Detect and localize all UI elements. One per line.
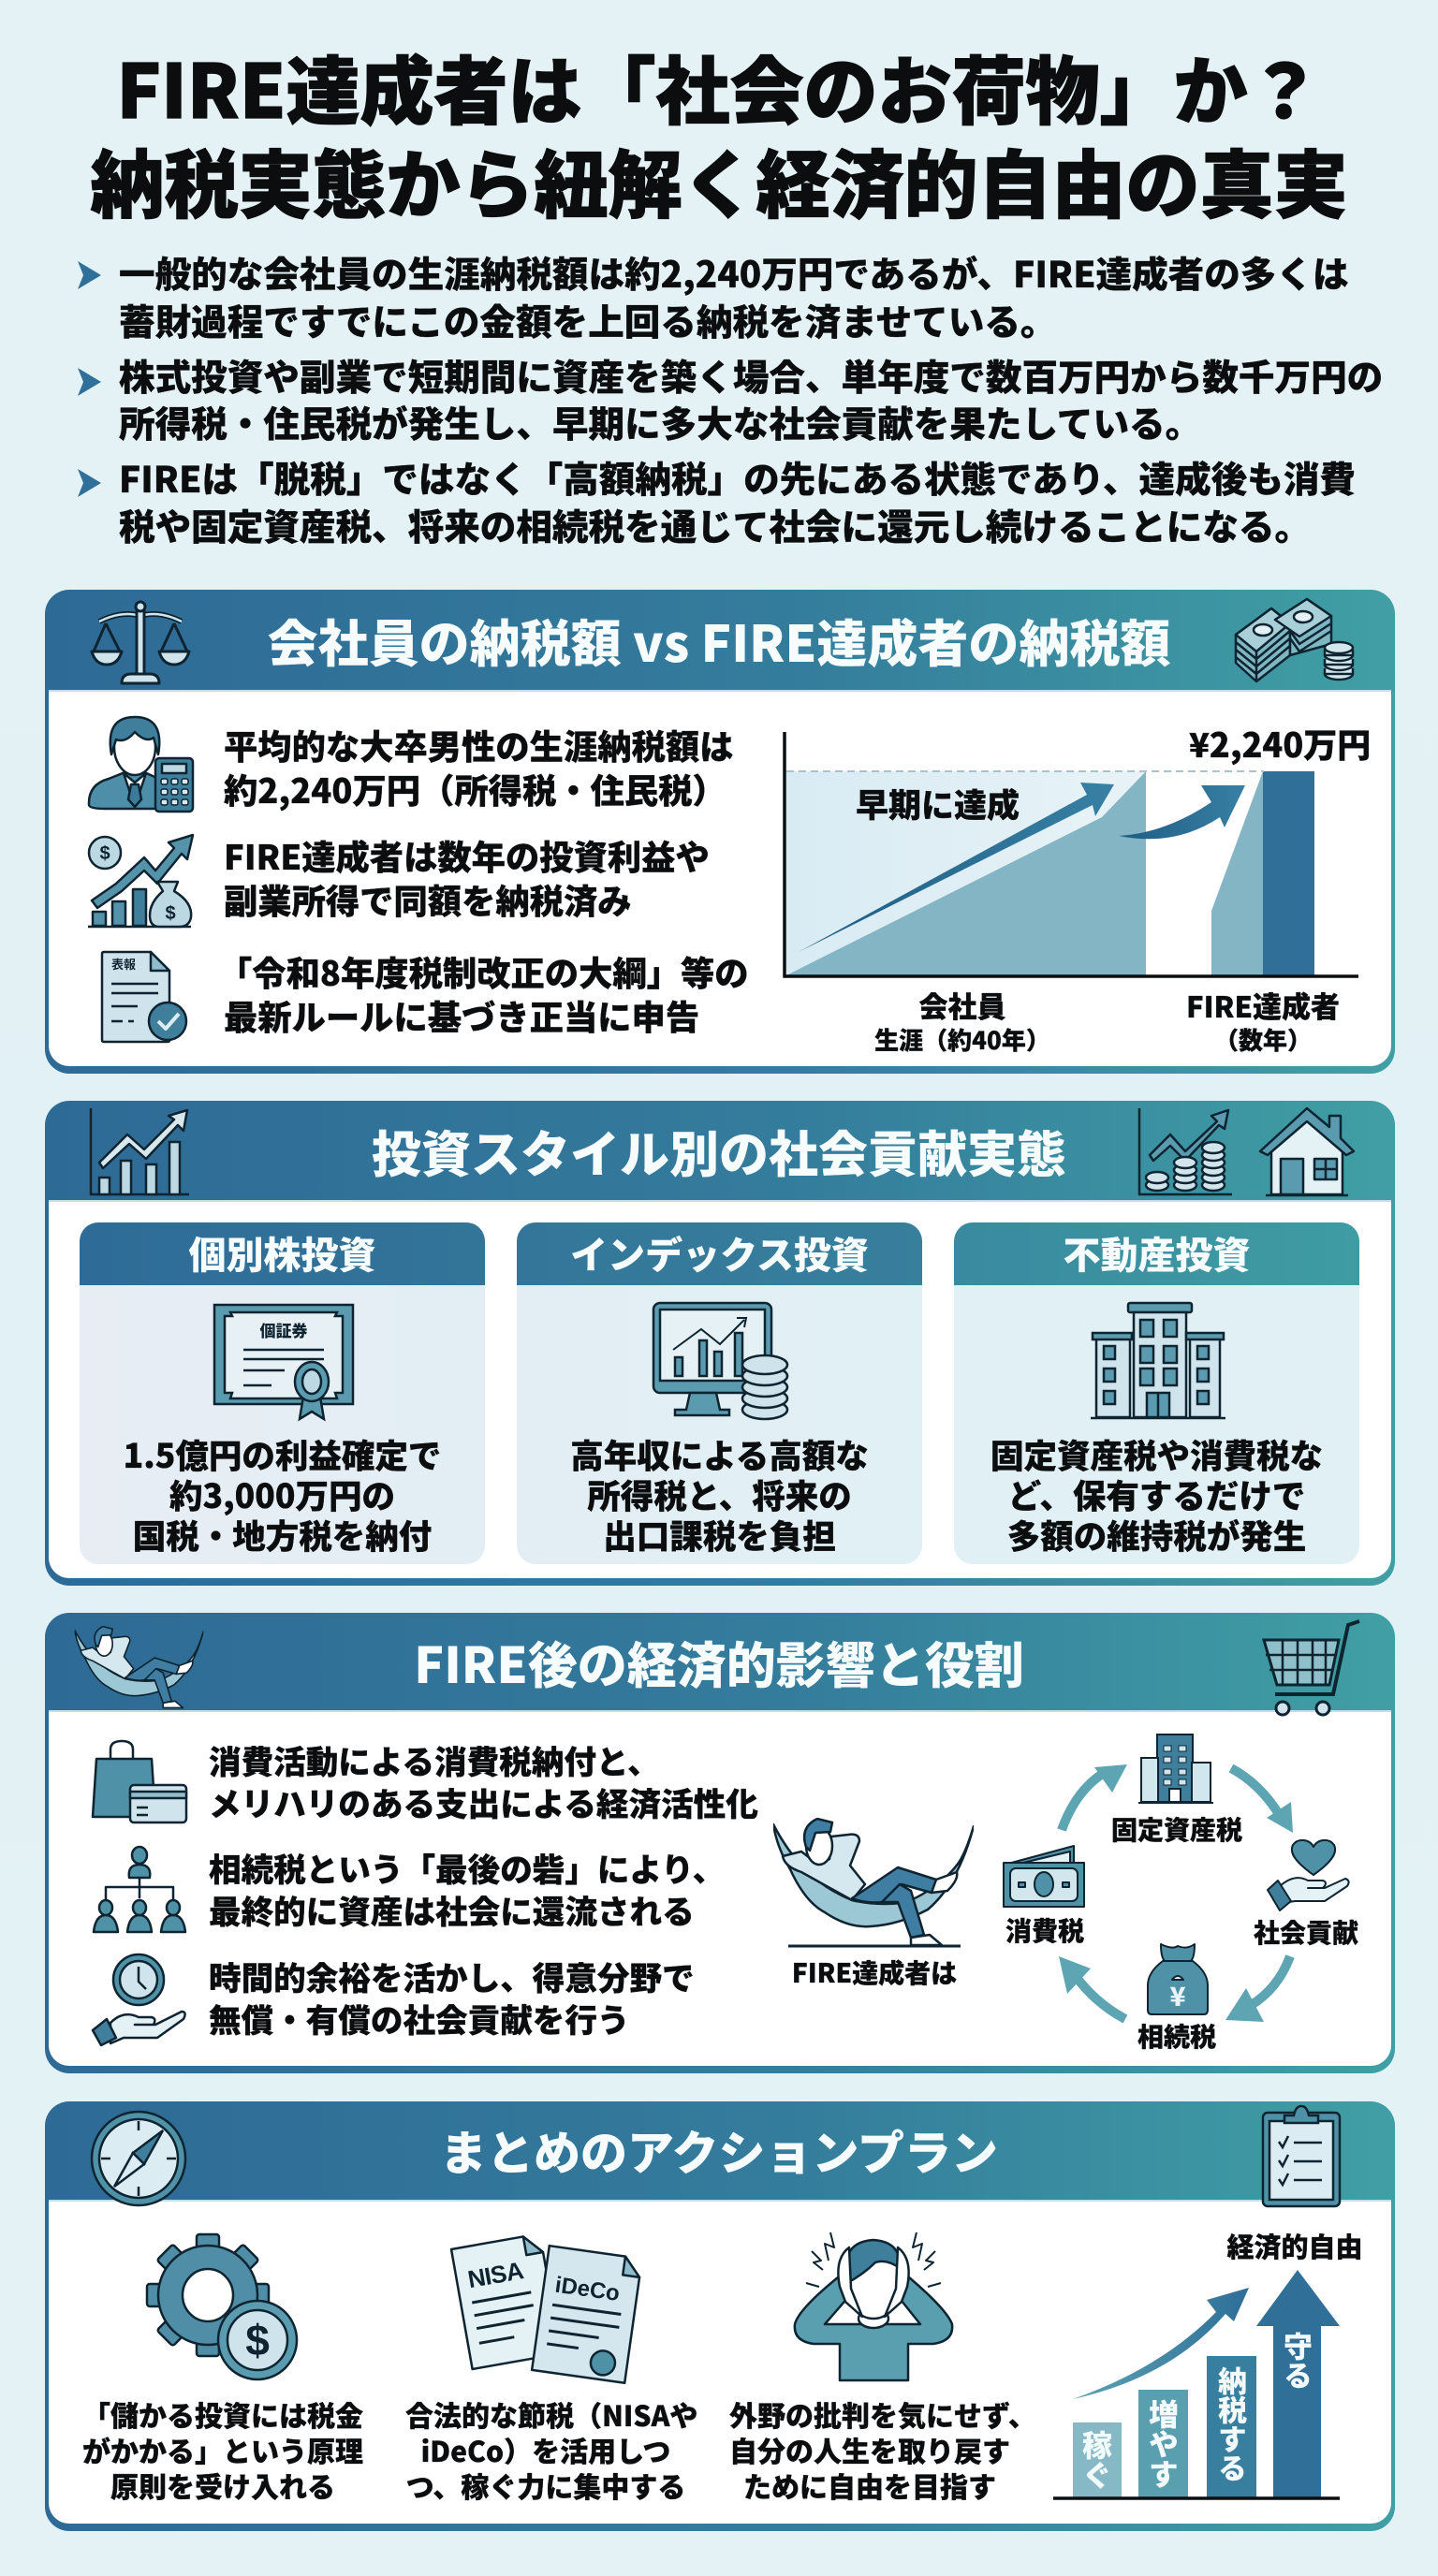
card text: 1.5億円の利益確定で	[124, 1430, 441, 1478]
chart: steps to freedom	[1053, 2270, 1343, 2504]
text: consumption: メリハリのある支出による経済活性化	[209, 1778, 758, 1825]
icon: person covering ears	[793, 2231, 954, 2380]
icon: yen money bag: ¥	[1169, 1977, 1186, 2014]
heading: まとめのアクションプラン	[440, 2116, 998, 2184]
text: legal saving: つ、稼ぐ力に集中する	[406, 2465, 685, 2506]
text: tax reform: 最新ルールに基づき正当に申告	[224, 991, 699, 1040]
icon: office building	[1138, 1734, 1213, 1803]
card text	[570, 1430, 869, 1559]
label: freedom: 経済的自由	[1226, 2226, 1363, 2265]
text: accept tax: 原則を受け入れる	[110, 2465, 335, 2506]
title	[90, 32, 1348, 233]
label: FIRE person: FIRE達成者は	[792, 1954, 957, 1991]
text: accept tax: 「儲かる投資には税金	[82, 2393, 363, 2435]
card text: 高年収による高額な	[570, 1430, 869, 1478]
icon: money stack	[1234, 597, 1354, 683]
card text: 約3,000万円の	[169, 1471, 395, 1518]
text: FIRE tax paid: FIRE達成者は数年の投資利益や	[224, 831, 710, 880]
heading: FIRE後の経済的影響と役割	[414, 1627, 1024, 1698]
text: lifetime tax: 約2,240万円（所得税・住民税）	[224, 765, 726, 813]
text: FIRE tax paid	[224, 831, 710, 924]
card text: 国税・地方税を納付	[133, 1511, 432, 1559]
bullet 1: 蓄財過程ですでにこの金額を上回る納税を済ませている。	[119, 294, 1056, 346]
panel: action plan	[45, 2101, 1395, 2531]
card header: 個別株投資	[189, 1225, 376, 1280]
bullet 3: FIREは「脱税」ではなく「高額納税」の先にある状態であり、達成後も消費	[119, 451, 1356, 504]
bullet 2	[78, 349, 1383, 448]
title: FIRE達成者は「社会のお荷物」か？	[116, 32, 1322, 139]
text: lifetime tax: 平均的な大卒男性の生涯納税額は	[224, 721, 733, 769]
text: consumption	[209, 1736, 758, 1825]
bullet list	[78, 246, 1383, 551]
bullet 1	[78, 246, 1349, 346]
icon: scales	[90, 601, 191, 685]
icon: tax return document	[101, 951, 187, 1043]
card header	[517, 1222, 922, 1285]
chart callout: 早期に達成	[856, 780, 1020, 827]
text: time: 無償・有償の社会貢献を行う	[209, 1995, 630, 2042]
diagram: tax cycle	[1003, 1734, 1350, 2024]
label: earn: 稼ぐ	[1076, 2430, 1119, 2490]
icon: clipboard checklist	[1262, 2104, 1341, 2207]
icon: stock certificate: 個証券	[260, 1318, 307, 1341]
chart label: salaryman	[874, 984, 1050, 1057]
card text: ど、保有するだけで	[1008, 1471, 1305, 1518]
icon: gear and coin: $	[245, 2316, 270, 2364]
icon: shopping bag and card	[92, 1739, 187, 1823]
text: legal saving: 合法的な節税（NISAや	[405, 2393, 697, 2435]
icon: compass	[90, 2110, 187, 2207]
text: ignore criticism: ために自由を目指す	[743, 2465, 996, 2506]
label: consumption tax: 消費税	[1005, 1911, 1084, 1949]
icon: apartment building	[1091, 1301, 1225, 1419]
card text: 所得税と、将来の	[587, 1471, 852, 1518]
text: inheritance: 最終的に資産は社会に還流される	[209, 1886, 695, 1933]
card header	[80, 1222, 485, 1285]
card text	[990, 1430, 1323, 1559]
text: tax reform: 「令和8年度税制改正の大綱」等の	[218, 947, 749, 996]
bullet 2: 所得税・住民税が発生し、早期に多大な社会貢献を果たしている。	[119, 396, 1201, 448]
icon: businessman with calculator	[88, 715, 195, 812]
text: time: 時間的余裕を活かし、得意分野で	[209, 1953, 695, 1999]
chart value: ¥2,240万円	[1189, 719, 1371, 768]
label: protect: 守る	[1277, 2332, 1319, 2390]
chart label: salaryman: 会社員	[919, 984, 1005, 1026]
chart label: salaryman: 生涯（約40年）	[874, 1022, 1050, 1057]
icon: NISA iDeCo documents	[449, 2235, 640, 2384]
bullet 3	[78, 451, 1356, 551]
icon: monitor chart and coins	[652, 1301, 788, 1421]
icon: family tree	[92, 1846, 187, 1934]
text: consumption: 消費活動による消費税納付と、	[209, 1736, 660, 1783]
chart: cumulative tax comparison	[783, 732, 1358, 978]
bullet 1: 一般的な会社員の生涯納税額は約2,240万円であるが、FIRE達成者の多くは	[119, 246, 1349, 299]
text: ignore criticism	[729, 2396, 1010, 2503]
chart label: FIRE: FIRE達成者	[1186, 984, 1340, 1026]
icon: growth chart and bag	[88, 833, 195, 929]
panel: salaryman vs FIRE tax	[45, 590, 1395, 1074]
label: property tax: 固定資産税	[1111, 1810, 1242, 1848]
icon: yen money bag	[1148, 1944, 1208, 2014]
text: ignore criticism: 自分の人生を取り戻す	[729, 2429, 1010, 2470]
icon: bar chart with arrow	[90, 1108, 189, 1196]
icon: growth chart and bag: $	[165, 903, 176, 924]
heading: 投資スタイル別の社会貢献実態	[372, 1116, 1066, 1187]
icon: stock certificate	[213, 1303, 354, 1421]
card header: インデックス投資	[570, 1225, 869, 1280]
text: ignore criticism: 外野の批判を気にせず、	[729, 2393, 1036, 2435]
icon: banknotes	[1004, 1846, 1084, 1907]
label: inheritance tax: 相続税	[1137, 2017, 1216, 2055]
icon: tax return document: 表報	[111, 955, 136, 973]
card text: 出口課税を負担	[603, 1511, 836, 1559]
panel: investment styles	[45, 1101, 1395, 1586]
panel: post-FIRE economic role	[45, 1613, 1395, 2073]
bullet 2: 株式投資や副業で短期間に資産を築く場合、単年度で数百万円から数千万円の	[119, 349, 1383, 402]
label: increase: 増やす	[1142, 2399, 1185, 2489]
label: social contribution: 社会貢献	[1254, 1913, 1358, 1951]
arrows	[1062, 1768, 1290, 2019]
bullet 3: 税や固定資産税、将来の相続税を通じて社会に還元し続けることになる。	[119, 499, 1311, 551]
icon: coins chart	[1138, 1108, 1232, 1196]
icon: heart and hand	[1268, 1840, 1349, 1910]
card header	[954, 1222, 1359, 1285]
text: inheritance: 相続税という「最後の砦」により、	[209, 1844, 725, 1891]
title: 納税実態から紐解く経済的自由の真実	[90, 125, 1348, 233]
text: tax reform	[218, 947, 749, 1040]
text: lifetime tax	[224, 721, 733, 813]
icon: small hammock	[75, 1626, 204, 1709]
card: real estate	[954, 1222, 1359, 1564]
heading: 会社員の納税額 vs FIRE達成者の納税額	[268, 603, 1170, 677]
card: index investing	[517, 1222, 922, 1564]
text: accept tax: がかかる」という原理	[82, 2429, 363, 2470]
text: legal saving: iDeCo）を活用しつ	[421, 2429, 670, 2470]
icon: NISA iDeCo documents: NISA	[465, 2256, 526, 2293]
card text: 多額の維持税が発生	[1007, 1511, 1306, 1559]
chart label: FIRE: （数年）	[1214, 1022, 1312, 1057]
text: time	[209, 1953, 695, 2042]
icon: NISA iDeCo documents: iDeCo	[553, 2273, 622, 2306]
card text	[124, 1430, 441, 1559]
icon: growth chart and bag: $	[99, 843, 110, 864]
card: individual stocks	[80, 1222, 485, 1564]
label: pay tax: 納税する	[1211, 2366, 1254, 2482]
text: FIRE tax paid: 副業所得で同額を納税済み	[224, 875, 632, 924]
icon: clock and hand	[92, 1953, 186, 2046]
text: inheritance	[209, 1844, 725, 1933]
icon: house	[1258, 1106, 1356, 1196]
chart label: FIRE	[1186, 984, 1340, 1057]
icon: person in hammock	[773, 1818, 974, 1947]
icon: shopping cart	[1262, 1619, 1360, 1717]
text: accept tax	[82, 2393, 363, 2506]
text: legal saving	[405, 2396, 686, 2503]
icon: gear and coin	[146, 2233, 298, 2381]
card header: 不動産投資	[1064, 1225, 1251, 1280]
card text: 固定資産税や消費税な	[990, 1430, 1323, 1478]
